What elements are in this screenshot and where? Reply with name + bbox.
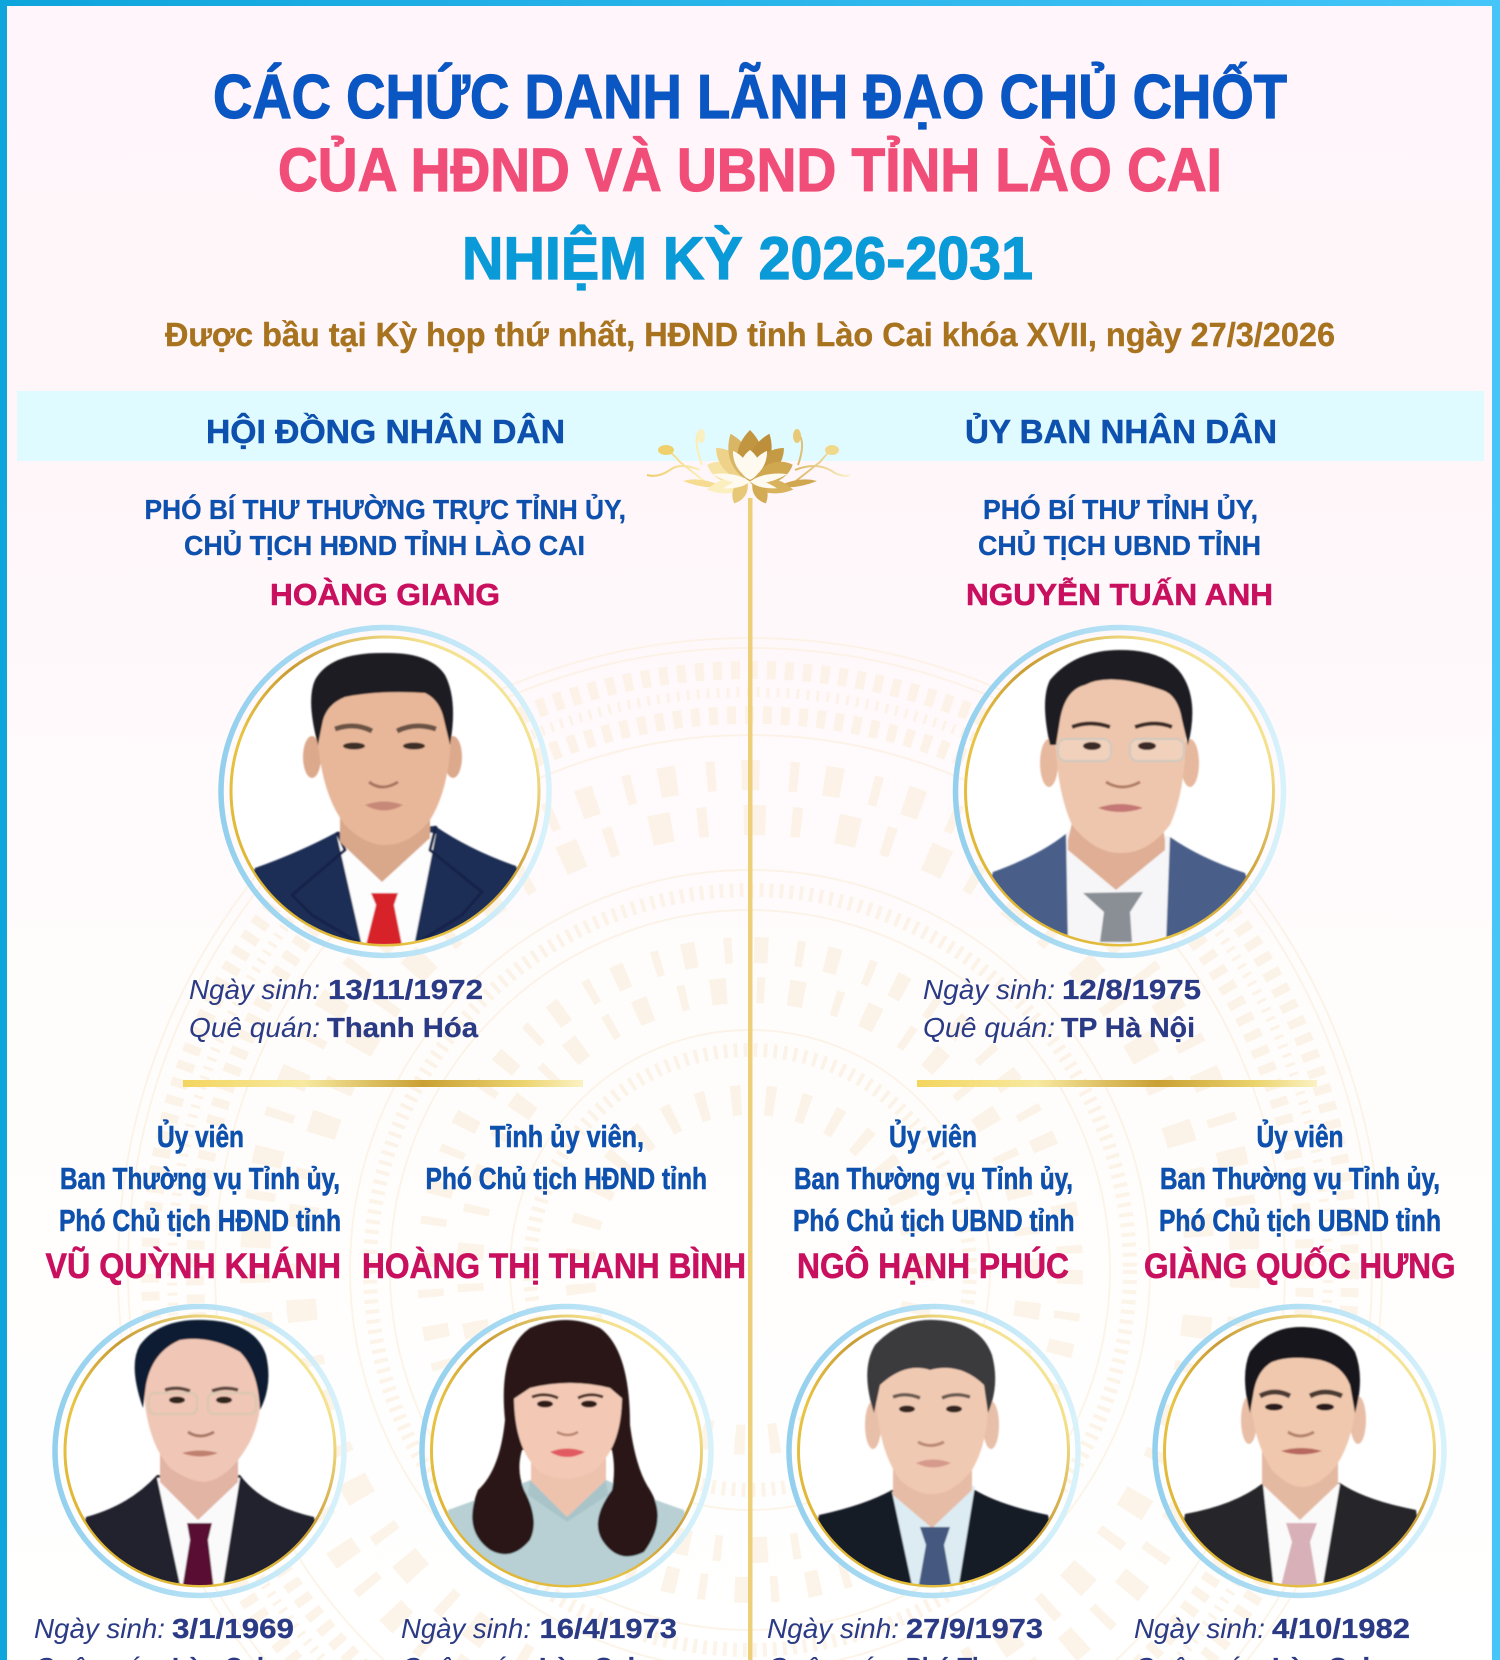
panel: Nguyễn Tuấn Anh heading: CHỦ TỊCH UBND TỈNH: [978, 529, 1261, 561]
title: CỦA HĐND VÀ UBND TỈNH LÀO CAI: [278, 136, 1222, 204]
info: Nguyễn Tuấn Anh: Ngày sinh:: [923, 974, 1055, 1005]
panel: Ngô Hạnh Phúc heading: [793, 1118, 1074, 1286]
portrait: Ngô Hạnh Phúc: [789, 1306, 1078, 1600]
header band: [17, 391, 1484, 461]
info: Vũ Quỳnh Khánh: Ngày sinh:: [34, 1613, 165, 1644]
panel: Vũ Quỳnh Khánh heading: [46, 1118, 341, 1286]
info: Ngô Hạnh Phúc: 27/9/1973: [906, 1613, 1043, 1644]
portrait: Vũ Quỳnh Khánh: [55, 1306, 344, 1600]
info: Nguyễn Tuấn Anh: 12/8/1975: [1062, 974, 1201, 1005]
panel: Ngô Hạnh Phúc heading: Ban Thường vụ Tỉnh ủy,: [794, 1161, 1073, 1196]
portrait: Giàng Quốc Hưng: [1155, 1306, 1444, 1600]
panel: Hoàng Giang heading: PHÓ BÍ THƯ THƯỜNG TRỰC TỈNH ỦY,: [144, 493, 626, 525]
header band: ỦY BAN NHÂN DÂN: [965, 413, 1277, 450]
panel: Vũ Quỳnh Khánh heading: VŨ QUỲNH KHÁNH: [46, 1246, 341, 1286]
info: Hoàng Thị Thanh Bình: [401, 1613, 677, 1660]
portrait: Hoàng Giang: [221, 628, 549, 956]
panel: Ngô Hạnh Phúc heading: NGÔ HẠNH PHÚC: [797, 1246, 1069, 1286]
header band: HỘI ĐỒNG NHÂN DÂN: [206, 412, 565, 450]
panel: Ngô Hạnh Phúc heading: Ủy viên: [889, 1118, 977, 1154]
info: Hoàng Giang: Ngày sinh:: [189, 974, 320, 1005]
info: Nguyễn Tuấn Anh: Quê quán:: [923, 1012, 1055, 1043]
panel: Vũ Quỳnh Khánh heading: Phó Chủ tịch HĐND tỉnh: [59, 1203, 341, 1238]
panel: Hoàng Thị Thanh Bình heading: [362, 1119, 746, 1286]
info: Ngô Hạnh Phúc: Ngày sinh:: [767, 1613, 899, 1644]
info: Vũ Quỳnh Khánh: 3/1/1969: [172, 1613, 294, 1644]
panel: Hoàng Giang heading: [144, 493, 626, 612]
frame: right bar: [1492, 0, 1500, 1660]
panel: Hoàng Thị Thanh Bình heading: Phó Chủ tịch HĐND tỉnh: [426, 1161, 707, 1196]
info: Giàng Quốc Hưng: Ngày sinh:: [1134, 1613, 1265, 1644]
panel: Nguyễn Tuấn Anh heading: PHÓ BÍ THƯ TỈNH ỦY,: [983, 493, 1258, 525]
portrait: Hoàng Thị Thanh Bình: [422, 1306, 711, 1600]
info: Nguyễn Tuấn Anh: [923, 974, 1201, 1043]
panel: Nguyễn Tuấn Anh heading: [966, 493, 1273, 612]
panel: Giàng Quốc Hưng heading: [1144, 1118, 1456, 1286]
info: Giàng Quốc Hưng: [1134, 1613, 1410, 1660]
center vertical line: [748, 498, 752, 1660]
subtitle: Được bầu tại Kỳ họp thứ nhất, HĐND tỉnh Lào Cai khóa XVII, ngày 27/3/2026: [165, 316, 1335, 353]
title: [213, 63, 1287, 292]
panel: Nguyễn Tuấn Anh heading: NGUYỄN TUẤN ANH: [966, 577, 1273, 612]
panel: Vũ Quỳnh Khánh heading: Ủy viên: [157, 1118, 244, 1154]
frame: left bar: [0, 0, 7, 1660]
info: Nguyễn Tuấn Anh: TP Hà Nội: [1061, 1012, 1195, 1043]
title: CÁC CHỨC DANH LÃNH ĐẠO CHỦ CHỐT: [213, 63, 1287, 132]
divider left: [183, 1080, 583, 1087]
panel: Hoàng Thị Thanh Bình heading: HOÀNG THỊ THANH BÌNH: [362, 1246, 746, 1286]
panel: Giàng Quốc Hưng heading: GIÀNG QUỐC HƯNG: [1144, 1246, 1456, 1286]
info: Vũ Quỳnh Khánh: [34, 1613, 294, 1660]
divider right: [917, 1080, 1317, 1087]
panel: Ngô Hạnh Phúc heading: Phó Chủ tịch UBND tỉnh: [793, 1203, 1074, 1238]
info: Hoàng Giang: Thanh Hóa: [327, 1012, 478, 1043]
portrait: Nguyễn Tuấn Anh: [956, 628, 1284, 956]
info: Hoàng Thị Thanh Bình: 16/4/1973: [540, 1613, 677, 1644]
panel: Hoàng Thị Thanh Bình heading: Tỉnh ủy viên,: [490, 1119, 644, 1154]
panel: Vũ Quỳnh Khánh heading: Ban Thường vụ Tỉnh ủy,: [60, 1161, 340, 1196]
title: NHIỆM KỲ 2026-2031: [462, 225, 1033, 292]
frame: top bar: [0, 0, 1500, 6]
info: Hoàng Giang: 13/11/1972: [328, 974, 483, 1005]
info: Ngô Hạnh Phúc: [767, 1613, 1043, 1660]
info: Giàng Quốc Hưng: 4/10/1982: [1272, 1613, 1410, 1644]
icon: golden lotus: [647, 429, 850, 506]
info: Hoàng Thị Thanh Bình: Ngày sinh:: [401, 1613, 531, 1644]
panel: Hoàng Giang heading: HOÀNG GIANG: [270, 577, 500, 612]
info: Hoàng Giang: [189, 974, 483, 1043]
panel: Hoàng Giang heading: CHỦ TỊCH HĐND TỈNH LÀO CAI: [184, 529, 585, 561]
panel: Giàng Quốc Hưng heading: Ủy viên: [1256, 1118, 1344, 1154]
info: Hoàng Giang: Quê quán:: [189, 1012, 320, 1043]
